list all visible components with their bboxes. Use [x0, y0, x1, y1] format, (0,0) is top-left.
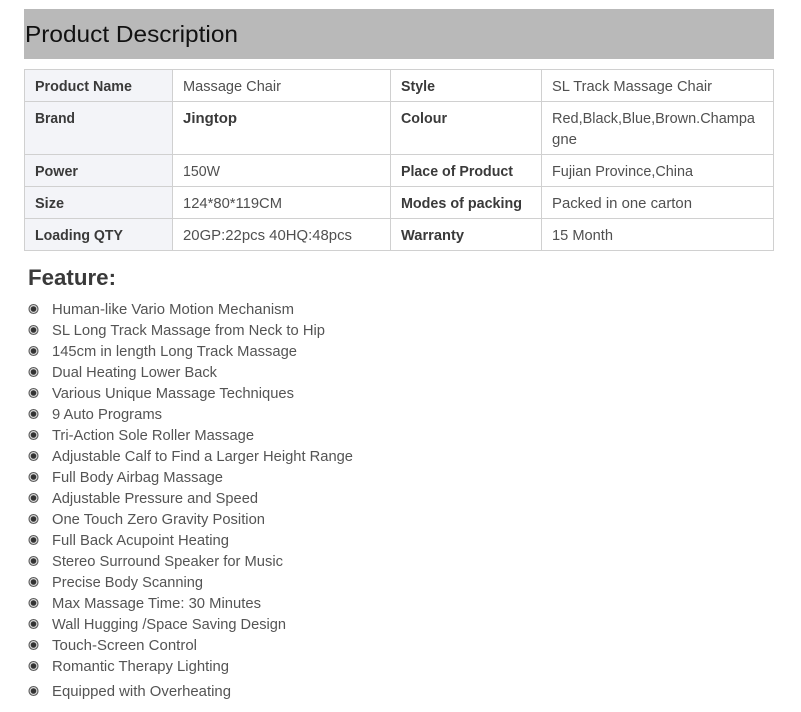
product specification table: Red,Black,Blue,Brown.Champa	[552, 111, 756, 127]
feature bullet list: Equipped with Overheating	[52, 684, 231, 700]
product specification table: Packed in one carton	[552, 196, 692, 212]
feature bullet list: Touch-Screen Control	[52, 638, 197, 654]
product specification table: SL Track Massage Chair	[552, 79, 712, 95]
feature bullet list	[29, 302, 353, 700]
feature bullet list: Max Massage Time: 30 Minutes	[52, 596, 261, 612]
feature bullet list: Human-like Vario Motion Mechanism	[52, 302, 294, 318]
feature bullet list: Various Unique Massage Techniques	[52, 386, 294, 402]
title banner	[24, 9, 774, 59]
product specification table: Product Name	[35, 79, 132, 95]
feature bullet list: Wall Hugging /Space Saving Design	[52, 617, 286, 633]
product specification table: Colour	[401, 111, 447, 127]
feature bullet list: Romantic Therapy Lighting	[52, 659, 229, 675]
product specification table: Loading QTY	[35, 228, 123, 244]
feature bullet list: 145cm in length Long Track Massage	[52, 344, 297, 360]
feature bullet list: Full Body Airbag Massage	[52, 470, 223, 486]
feature bullet list: Tri-Action Sole Roller Massage	[52, 428, 254, 444]
product specification table: 20GP:22pcs 40HQ:48pcs	[183, 228, 352, 244]
product specification table: Place of Product	[401, 164, 513, 180]
product specification table: Jingtop	[183, 111, 237, 127]
product specification table: Massage Chair	[183, 79, 281, 95]
feature bullet list: Stereo Surround Speaker for Music	[52, 554, 283, 570]
feature bullet list: 9 Auto Programs	[52, 407, 162, 423]
product specification table: Size	[35, 196, 64, 212]
product specification table: 150W	[183, 164, 220, 180]
feature bullet list: Precise Body Scanning	[52, 575, 203, 591]
feature bullet list: Dual Heating Lower Back	[52, 365, 218, 381]
feature bullet list: SL Long Track Massage from Neck to Hip	[52, 323, 325, 339]
product specification table: gne	[552, 132, 577, 148]
feature heading: Feature:	[28, 265, 116, 290]
feature bullet list: Full Back Acupoint Heating	[52, 533, 229, 549]
product specification table: 15 Month	[552, 228, 613, 244]
product specification table: 124*80*119CM	[183, 196, 282, 212]
product specification table: Power	[35, 164, 78, 180]
title banner: Product Description	[25, 21, 238, 47]
product specification table: Modes of packing	[401, 196, 522, 212]
product specification table: Fujian Province,China	[552, 164, 694, 180]
product specification table	[24, 69, 774, 251]
product specification table: Brand	[35, 111, 75, 127]
feature bullet list: Adjustable Pressure and Speed	[52, 491, 258, 507]
feature bullet list: One Touch Zero Gravity Position	[52, 512, 265, 528]
feature bullet list: Adjustable Calf to Find a Larger Height Range	[52, 449, 353, 465]
product specification table: Warranty	[401, 228, 464, 244]
product specification table: Style	[401, 79, 435, 95]
